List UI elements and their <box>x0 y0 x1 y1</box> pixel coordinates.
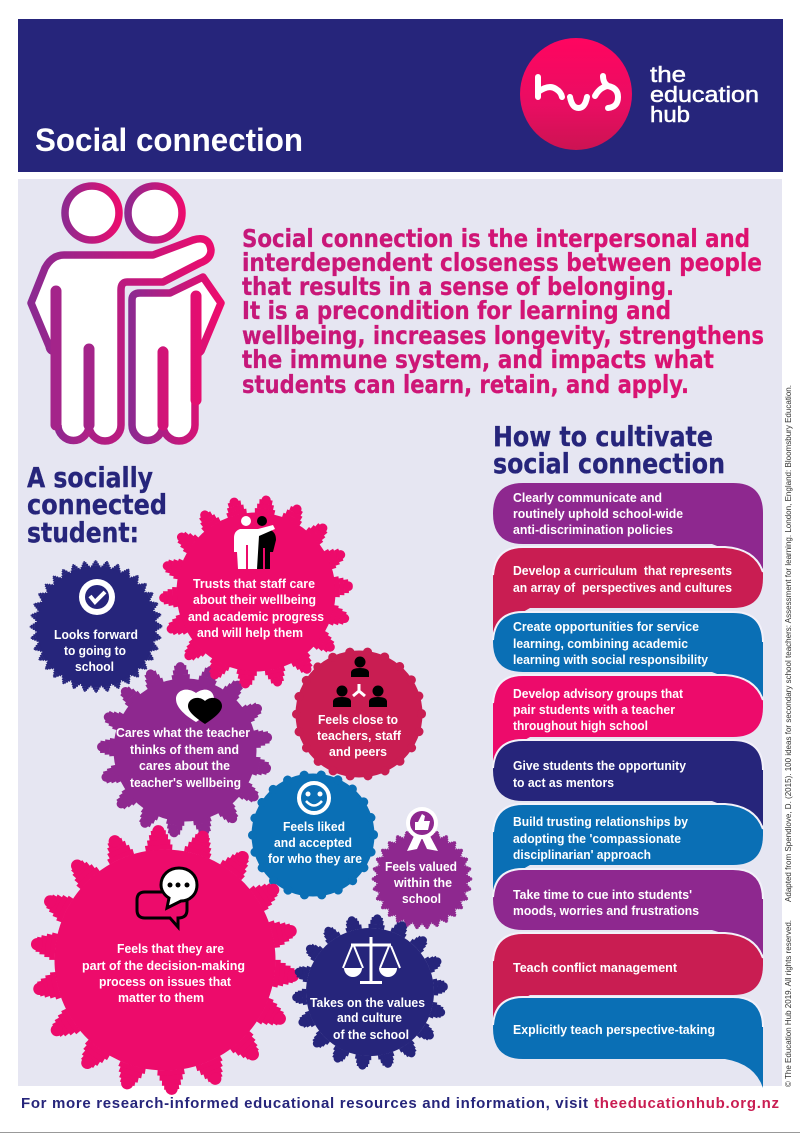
heading: a socially connected student: connected <box>27 489 167 521</box>
logo: the education hub <box>520 38 759 150</box>
gear: feels liked and accepted <box>252 774 374 896</box>
icon: smiley face <box>299 783 329 813</box>
vertical credit text: Adapted from Spendlove, D. (2015). 100 ideas for secondary school teachers: Assessment for learning. London, England: Bloomsbury Education. <box>784 385 793 902</box>
icon: two hearts <box>176 690 222 724</box>
ribbon 4: advisory groups <box>493 675 763 768</box>
intro paragraph: that results in a sense of belonging. <box>242 272 674 301</box>
gear: feels liked and accepted: for who they are <box>268 852 362 866</box>
ribbon 1: anti-discrimination policies: routinely uphold school-wide <box>513 507 683 521</box>
gear: trusts that staff care: and academic progress <box>188 610 324 624</box>
heading: a socially connected student: student: <box>27 517 139 549</box>
gear: cares what the teacher thinks: teacher's wellbeing <box>130 776 241 790</box>
gear: trusts that staff care: about their wellbeing <box>193 593 316 607</box>
gear: feels close to teachers, staff and peers: teachers, staff <box>317 729 402 743</box>
ribbon 3: service learning: learning, combining academic <box>513 637 688 651</box>
page title: Social connection <box>35 122 303 158</box>
gear: feels close to teachers, staff and peers: and peers <box>329 745 387 759</box>
ribbon 2: curriculum <box>493 547 763 640</box>
gear: feels valued within the school <box>372 807 472 929</box>
gear: feels liked and accepted: and accepted <box>274 836 352 850</box>
logo: the education hub: education <box>650 82 759 107</box>
intro paragraph: students can learn, retain, and apply. <box>242 370 689 399</box>
gear: cares what the teacher thinks: thinks of them and <box>130 743 239 757</box>
gear: feels valued within the school: Feels valued <box>385 860 457 874</box>
icon: rosette with thumbs up <box>406 807 438 851</box>
icon: two people with arm around shoulder <box>31 186 221 441</box>
gear: big decision-making: process on issues that <box>99 975 232 989</box>
heading: a socially connected student: A socially <box>27 462 153 494</box>
gear: feels valued within the school: school <box>402 892 441 906</box>
ribbon 6: trusting relationships: disciplinarian' approach <box>513 848 651 862</box>
ribbon 8: conflict management <box>493 933 763 1026</box>
gear: trusts that staff care <box>158 494 354 690</box>
gear: feels close to teachers, staff and peers <box>296 650 422 778</box>
gear: cares what the teacher thinks: Cares what the teacher <box>116 726 250 740</box>
intro paragraph: It is a precondition for learning and <box>242 296 671 325</box>
gear: looks forward to going to school <box>30 561 162 692</box>
main lavender panel <box>18 179 782 1086</box>
ribbon 2: curriculum: Develop a curriculum that represents <box>513 564 732 578</box>
gear: feels valued within the school: within the <box>393 876 452 890</box>
ribbon 9: perspective-taking: Explicitly teach perspective-taking <box>513 1023 715 1037</box>
gear: big decision-making <box>21 816 309 1104</box>
ribbon 1: anti-discrimination policies: Clearly communicate and <box>513 491 662 505</box>
ribbon 5: mentors: to act as mentors <box>513 776 614 790</box>
gear: takes on the values: and culture <box>337 1011 402 1025</box>
intro paragraph: the immune system, and impacts what <box>242 345 714 374</box>
ribbon 4: advisory groups: pair students with a teacher <box>513 703 675 717</box>
heading: how to cultivate <box>493 421 725 480</box>
gear: takes on the values <box>291 913 449 1071</box>
ribbon 7: moods: Take time to cue into students' <box>513 888 692 902</box>
icon: two people <box>234 516 276 569</box>
ribbon 7: moods <box>493 869 763 960</box>
ribbon 4: advisory groups: Develop advisory groups that <box>513 687 684 701</box>
vertical credit text: © The Education Hub 2019. All rights reserved. <box>784 920 793 1087</box>
footer link line: theeducationhub.org.nz <box>594 1095 779 1112</box>
heading: a socially connected student <box>27 462 167 549</box>
ribbon 6: trusting relationships: adopting the 'compassionate <box>513 832 681 846</box>
gear: takes on the values: Takes on the values <box>310 996 425 1010</box>
gear: feels liked and accepted: Feels liked <box>283 820 345 834</box>
ribbon 3: service learning: learning with social responsibility <box>513 653 708 667</box>
ribbon 3: service learning <box>493 612 763 703</box>
gear: looks forward to going to school: Looks forward <box>54 628 138 642</box>
icon: balance scales <box>343 937 400 982</box>
intro paragraph <box>242 224 764 399</box>
ribbon 6: trusting relationships <box>493 804 763 896</box>
gear: cares what the teacher thinks: cares about the <box>139 759 230 773</box>
header band <box>18 19 783 172</box>
icon: three connected people <box>333 656 387 707</box>
logo: the education hub: the <box>650 62 686 87</box>
icon: check mark <box>79 579 115 615</box>
ribbon 6: trusting relationships: Build trusting relationships by <box>513 815 688 829</box>
ribbon 7: moods: moods, worries and frustrations <box>513 904 699 918</box>
gear: trusts that staff care: Trusts that staff care <box>193 577 315 591</box>
logo: the education hub: hub <box>650 102 690 127</box>
ribbon 2: curriculum: an array of perspectives and cultures <box>513 581 732 595</box>
ribbon 5: mentors: Give students the opportunity <box>513 759 686 773</box>
gear: looks forward to going to school: to going to <box>64 644 126 658</box>
gear: takes on the values: of the school <box>333 1028 409 1042</box>
ribbon 1: anti-discrimination policies <box>493 483 763 575</box>
ribbon 9: perspective-taking <box>493 997 763 1088</box>
icon: speech bubbles <box>137 868 197 927</box>
ribbon list: how to cultivate <box>493 483 763 1088</box>
ribbon 8: conflict management: Teach conflict management <box>513 961 678 975</box>
gear: looks forward to going to school: school <box>75 660 114 674</box>
ribbon 1: anti-discrimination policies: anti-discrimination policies <box>513 523 673 537</box>
gear: big decision-making: matter to them <box>118 991 204 1005</box>
ribbon 3: service learning: Create opportunities for service <box>513 620 699 634</box>
gear: trusts that staff care: and will help them <box>197 626 303 640</box>
ribbon 5: mentors <box>493 740 763 832</box>
heading: how to cultivate: How to cultivate <box>493 421 713 453</box>
gear: big decision-making: Feels that they are <box>117 942 224 956</box>
footer link line: For more research-informed educational resources and information, visit <box>21 1095 588 1112</box>
gear: big decision-making: part of the decision-making <box>82 959 245 973</box>
gear: cares what the teacher thinks <box>85 650 285 850</box>
ribbon 4: advisory groups: throughout high school <box>513 719 648 733</box>
heading: how to cultivate: social connection <box>493 448 725 480</box>
gear: feels close to teachers, staff and peers: Feels close to <box>318 713 398 727</box>
